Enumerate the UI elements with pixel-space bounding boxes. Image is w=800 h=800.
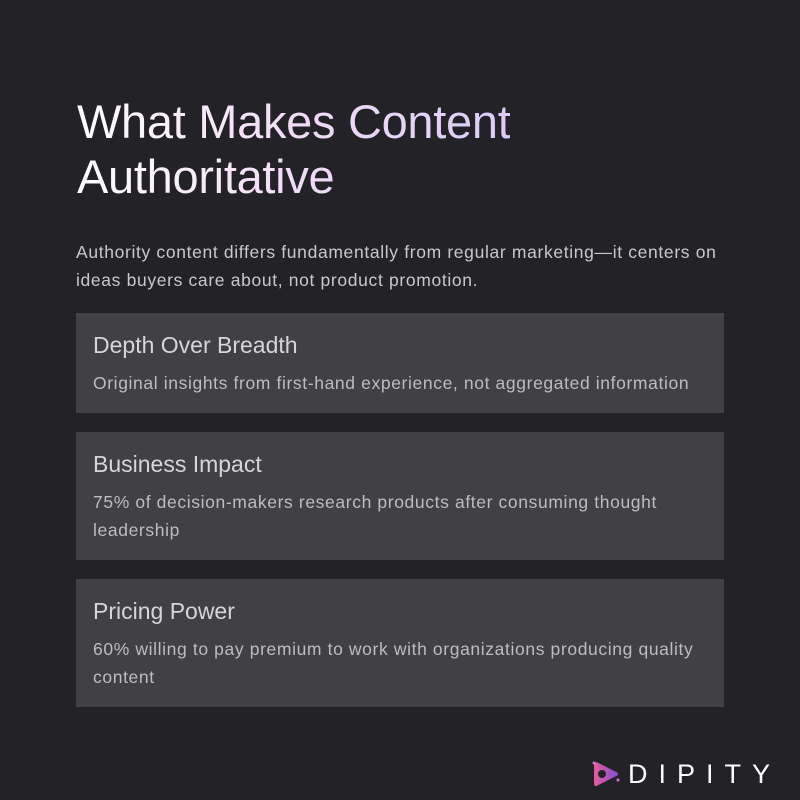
card: business impact: Business Impact xyxy=(93,451,262,477)
card: pricing power: Pricing Power xyxy=(93,598,235,624)
icon: logo mark xyxy=(592,762,620,786)
wordmark: DIPITY xyxy=(628,759,781,789)
card: pricing power: 60% willing to pay premium to work with organizations producing quality content xyxy=(93,639,693,687)
card: business impact: 75% of decision-makers research products after consuming thought leadership xyxy=(93,492,657,540)
logo xyxy=(592,759,781,789)
card: depth over breadth: Depth Over Breadth xyxy=(93,332,298,358)
intro text: Authority content differs fundamentally from regular marketing—it centers on ideas buyers care about, not product promotion. xyxy=(76,242,716,290)
card: business impact xyxy=(76,432,724,560)
card: pricing power xyxy=(76,579,724,707)
title: What Makes Content xyxy=(77,95,510,148)
card: depth over breadth: Original insights from first-hand experience, not aggregated information xyxy=(93,373,689,393)
title: Authoritative xyxy=(77,150,334,203)
card: depth over breadth xyxy=(76,313,724,413)
title xyxy=(77,94,510,204)
